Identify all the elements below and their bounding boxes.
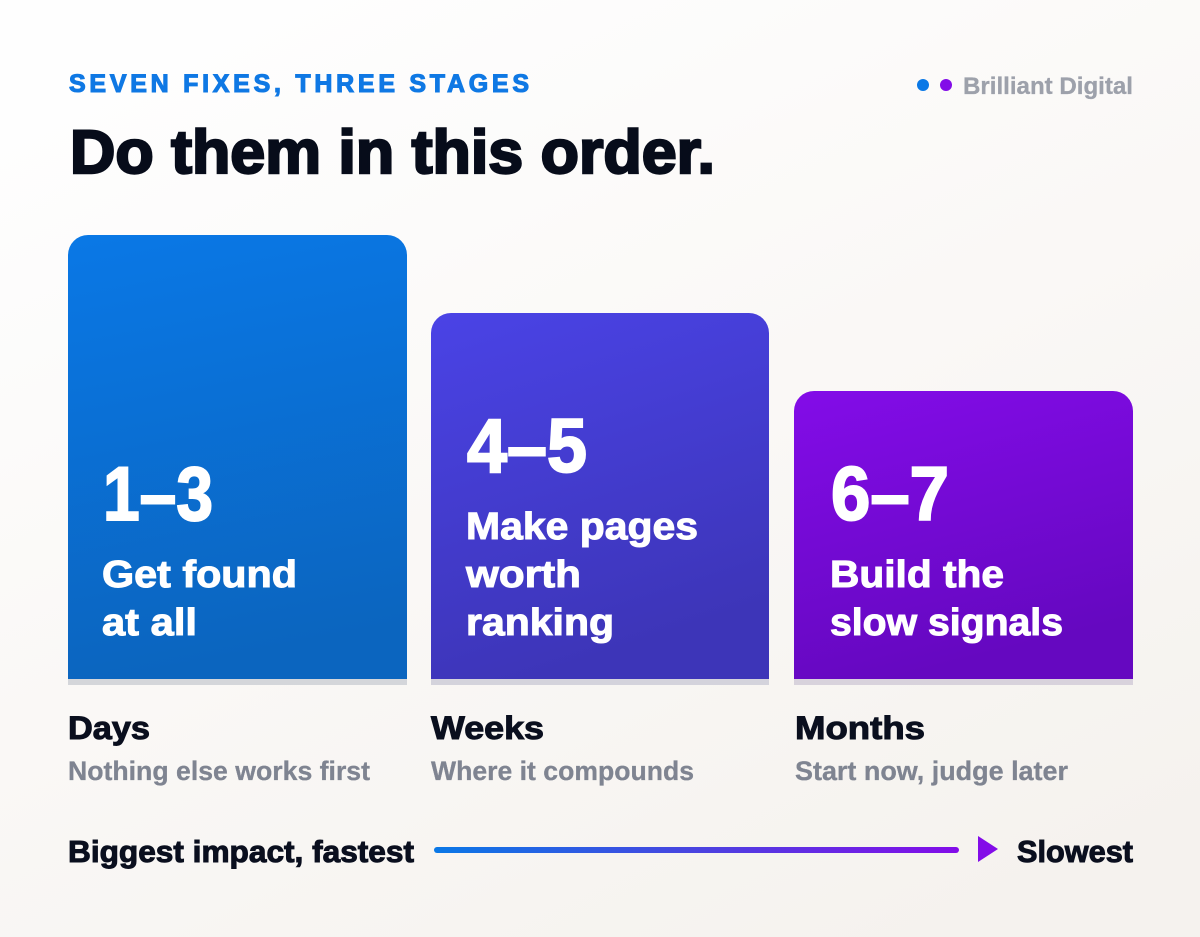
axis line (434, 847, 959, 853)
brand mark (917, 73, 1133, 100)
arrow (978, 836, 998, 862)
eyebrow heading: SEVEN FIXES, THREE STAGES (69, 70, 529, 98)
caption: days (68, 710, 370, 786)
axis end label: Slowest (1017, 834, 1133, 869)
brand name: Brilliant Digital (963, 73, 1133, 100)
timeframe: Months (795, 710, 925, 746)
stage description: worth (465, 554, 581, 596)
stage description: Make pages (466, 506, 698, 548)
card background (68, 235, 407, 679)
title: Do them in this order. (70, 118, 715, 186)
timeframe: Days (68, 710, 150, 746)
stage description: Get found (102, 554, 297, 596)
axis start label: Biggest impact, fastest (68, 834, 414, 869)
caption: weeks (431, 710, 694, 786)
note: Where it compounds (431, 756, 694, 786)
timeframe: Weeks (431, 710, 544, 746)
stage description: ranking (466, 602, 614, 644)
icon: purple dot (940, 79, 952, 91)
stage description: Build the (830, 554, 1004, 596)
card background (431, 313, 769, 679)
caption: months (795, 710, 1068, 786)
axis: impact to speed (68, 834, 1133, 869)
stage description: at all (102, 602, 197, 644)
card shelf (794, 679, 1133, 685)
card shelf (431, 679, 769, 685)
stage description: slow signals (830, 602, 1063, 644)
panel: stage 1-3 (68, 235, 407, 685)
card shelf (68, 679, 407, 685)
note: Start now, judge later (795, 756, 1068, 786)
note: Nothing else works first (68, 756, 370, 786)
stage number: 1–3 (103, 452, 213, 537)
card background (794, 391, 1133, 679)
panel: stage 4-5 (431, 313, 769, 685)
stage number: 6–7 (831, 452, 949, 537)
panel: stage 6-7 (794, 391, 1133, 685)
stage number: 4–5 (467, 404, 587, 489)
icon: blue dot (917, 79, 929, 91)
